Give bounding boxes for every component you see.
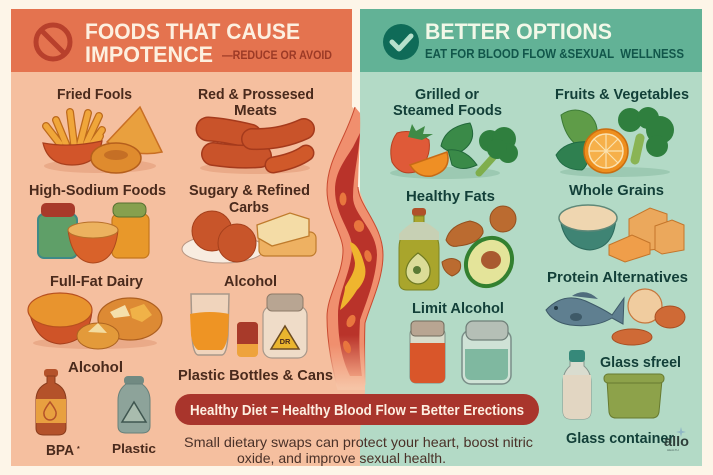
food group: fruits and vegetables <box>555 86 689 177</box>
icon: avocado <box>457 229 521 295</box>
icon: grain bowl and blocks <box>559 205 684 262</box>
food group: alcohol: Alcohol <box>224 273 277 290</box>
header band: better options <box>360 9 702 72</box>
icon: olive oil bottle <box>399 208 439 290</box>
icon: pickle jars and noodles <box>38 203 149 263</box>
subheading: reduce or avoid: —REDUCE OR AVOID <box>222 48 332 62</box>
blood cells <box>340 192 373 354</box>
logo: allo health <box>664 427 689 452</box>
icon: two jars <box>410 321 511 384</box>
heading: foods that cause impotence: FOODS THAT CAUSE <box>85 19 300 44</box>
icon: sausages <box>200 129 310 174</box>
heading: foods that cause impotence: IMPOTENCE <box>85 42 213 67</box>
food group: limit alcohol: Limit Alcohol <box>412 300 504 317</box>
icon: strawberry, orange, spinach and broccoli <box>390 123 518 179</box>
closing note: Small dietary swaps can protect your heart, boost nitric <box>184 434 533 450</box>
food group: fried foods: Fried Fools <box>57 86 132 103</box>
food group: whole grains <box>559 182 684 262</box>
food group: alcohol <box>190 273 307 358</box>
food group: healthy fats <box>399 188 521 295</box>
icon: dairy bowl and cheese plate <box>28 293 162 349</box>
food group: fried foods <box>43 86 162 173</box>
food group: full-fat dairy <box>28 273 162 349</box>
heading: foods that cause impotence <box>85 19 300 67</box>
food group: high-sodium foods <box>29 182 166 263</box>
food group: glass steel: Glass sfreel <box>600 354 681 371</box>
banner: healthy diet equals better erections <box>175 394 539 425</box>
food group: grilled or steamed foods: Grilled or <box>415 86 479 103</box>
food group: whole grains: Whole Grains <box>569 182 664 199</box>
icon: greens, orange and broccoli <box>556 107 674 177</box>
food group: BPA <box>36 369 80 459</box>
food group: plastic: Plastic <box>112 441 156 456</box>
food group: sugary and refined carbs: Sugary & Refined <box>189 182 310 199</box>
food group: high-sodium foods: High-Sodium Foods <box>29 182 166 199</box>
food group: full-fat dairy: Full-Fat Dairy <box>50 273 144 290</box>
food group: limit alcohol <box>410 300 511 384</box>
food group: red and processed meats <box>198 86 314 174</box>
food group: plastic <box>112 376 156 456</box>
food group: protein alternatives: Protein Alternatives <box>547 269 688 286</box>
food group: glass steel <box>563 350 681 419</box>
header band: foods to avoid <box>11 9 352 72</box>
blood vessel illustration <box>327 107 383 390</box>
icon: prohibition sign <box>36 25 70 59</box>
food group: protein alternatives <box>546 269 688 345</box>
food group: sugary and refined carbs <box>182 182 316 263</box>
icon: fries, samosa and onion ring <box>43 107 162 173</box>
icon: check mark <box>383 24 419 60</box>
food group: glass container: Glass container <box>566 430 674 447</box>
food group: red and processed meats: Red & Prossesed <box>198 86 314 103</box>
food group: plastic bottles and cans: Plastic Bottles & Cans <box>178 367 333 384</box>
icon: grey bottle <box>118 376 150 433</box>
food group: healthy fats: Healthy Fats <box>406 188 495 205</box>
food group: grilled or steamed foods: Steamed Foods <box>393 102 502 119</box>
subheading: eat for blood flow: EAT FOR BLOOD FLOW &SEXUAL WELLNESS <box>425 46 684 61</box>
banner: healthy diet equals better erections: Healthy Diet = Healthy Blood Flow = Better Erections <box>190 402 524 419</box>
heading: better options: BETTER OPTIONS <box>425 19 612 44</box>
plaque <box>340 242 365 310</box>
icon: amber bottle <box>36 369 66 435</box>
icon: green container <box>604 374 664 418</box>
closing note: oxide, and improve sexual health. <box>237 450 446 466</box>
logo: allo health: allo <box>664 433 689 449</box>
icon: fish <box>546 292 624 326</box>
food group: sugary and refined carbs: Carbs <box>229 199 269 216</box>
food group: red and processed meats: Meats <box>234 102 277 119</box>
food group: alcohol, second: Alcohol <box>68 359 123 376</box>
food group: fruits and vegetables: Fruits & Vegetables <box>555 86 689 103</box>
food group: BPA: * <box>77 446 80 453</box>
panel: foods that cause impotence <box>11 9 383 466</box>
icon: egg and patties <box>612 289 685 345</box>
closing note <box>184 434 533 466</box>
food group: grilled or steamed foods <box>390 86 518 179</box>
food group: BPA: BPA <box>46 442 74 459</box>
icon: walnuts <box>442 206 516 276</box>
logo: allo health: HEALTH <box>667 448 679 452</box>
panel: better options <box>360 9 702 466</box>
label on jar: DR <box>280 337 291 346</box>
icon: pastries and bread <box>182 211 316 263</box>
icon: glass bottle <box>563 350 591 419</box>
